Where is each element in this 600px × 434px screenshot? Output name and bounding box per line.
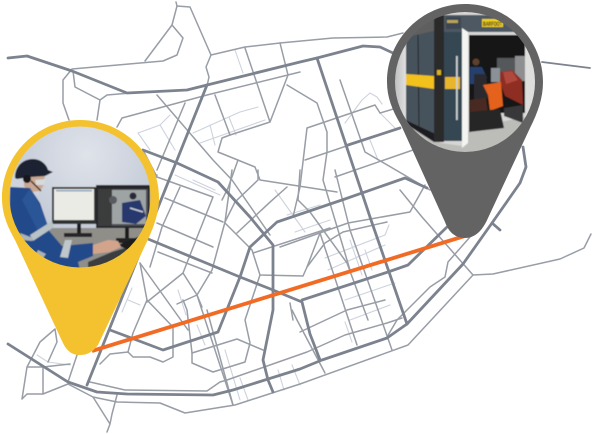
- headset: [23, 175, 41, 191]
- interior: [469, 35, 525, 113]
- cap: [15, 159, 53, 179]
- door: [462, 28, 468, 148]
- cabin header: [444, 15, 526, 32]
- operator photo: [9, 126, 151, 270]
- pin body: [387, 4, 543, 238]
- grey location pin: [387, 4, 543, 238]
- route line: [92, 235, 468, 351]
- door handle: [456, 56, 458, 120]
- simulator photo: [394, 11, 537, 153]
- right wall: [524, 116, 526, 118]
- monitor left: [52, 187, 96, 237]
- pin body: [2, 120, 159, 355]
- reflective stripes: [30, 221, 54, 241]
- red machine: [500, 70, 523, 105]
- side panels: [406, 31, 434, 133]
- yellow side band: [406, 74, 434, 89]
- second operator: [491, 68, 500, 82]
- keyboard and dark foot: [88, 248, 128, 267]
- yellow location pin: [2, 120, 159, 355]
- jacket: [9, 187, 93, 270]
- face: [24, 172, 45, 192]
- roof: [412, 15, 444, 36]
- logo plate: [482, 19, 503, 28]
- desk: [50, 228, 151, 268]
- operator: [472, 58, 480, 66]
- hand: [93, 240, 121, 254]
- monitor right: [96, 185, 150, 243]
- cabin base: [406, 120, 434, 142]
- major roads: [8, 46, 590, 395]
- light grid streets: [37, 50, 395, 400]
- left wall: [395, 46, 406, 118]
- corner pillar: [434, 15, 444, 142]
- seat: [474, 74, 488, 100]
- platform: [469, 109, 504, 132]
- logo plate: BARFOOT: [483, 22, 502, 28]
- orange console: [483, 82, 503, 111]
- front panel: [444, 31, 462, 141]
- floor: [412, 117, 525, 152]
